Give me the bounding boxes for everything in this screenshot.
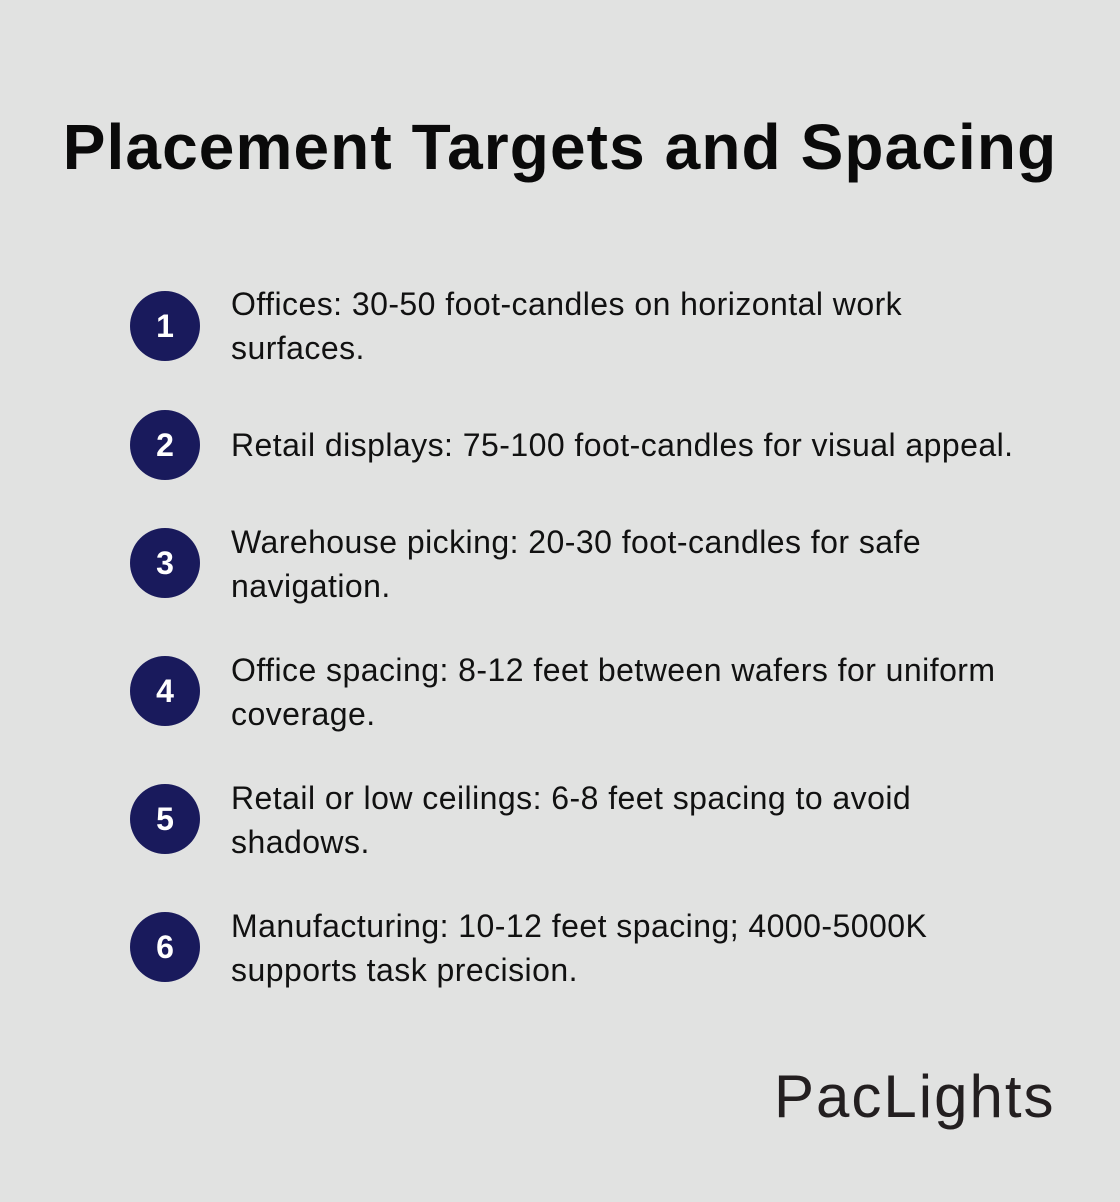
badge 3 — [130, 528, 200, 598]
text 6: supports task precision. — [231, 952, 578, 988]
badge 3: 3 — [156, 545, 174, 581]
badge 5 — [130, 784, 200, 854]
text 3 — [231, 524, 921, 604]
badge 2 — [130, 410, 200, 480]
badge 4 — [130, 656, 200, 726]
item 6 — [130, 908, 927, 988]
text 3: Warehouse picking: 20-30 foot-candles for safe — [231, 524, 921, 560]
item 4 — [130, 652, 996, 732]
badge 2: 2 — [156, 427, 174, 463]
text 4: coverage. — [231, 696, 376, 732]
text 3: navigation. — [231, 568, 391, 604]
item 5 — [130, 780, 911, 860]
item 3 — [130, 524, 921, 604]
badge 6: 6 — [156, 929, 174, 965]
text 2: Retail displays: 75-100 foot-candles for visual appeal. — [231, 427, 1014, 463]
item 2 — [130, 410, 1014, 480]
text 1: surfaces. — [231, 330, 365, 366]
text 4: Office spacing: 8-12 feet between wafers for uniform — [231, 652, 996, 688]
text 5: Retail or low ceilings: 6-8 feet spacing to avoid — [231, 780, 911, 816]
title: Placement Targets and Spacing — [63, 111, 1057, 183]
text 4 — [231, 652, 996, 732]
text 6: Manufacturing: 10-12 feet spacing; 4000-5000K — [231, 908, 927, 944]
logo: PacLights — [774, 1063, 1056, 1130]
badge 5: 5 — [156, 801, 174, 837]
item 1 — [130, 286, 902, 366]
text 6 — [231, 908, 927, 988]
text 5 — [231, 780, 911, 860]
badge 6 — [130, 912, 200, 982]
badge 1 — [130, 291, 200, 361]
text 1 — [231, 286, 902, 366]
badge 1: 1 — [156, 308, 174, 344]
text 1: Offices: 30-50 foot-candles on horizontal work — [231, 286, 902, 322]
text 5: shadows. — [231, 824, 370, 860]
badge 4: 4 — [156, 673, 174, 709]
